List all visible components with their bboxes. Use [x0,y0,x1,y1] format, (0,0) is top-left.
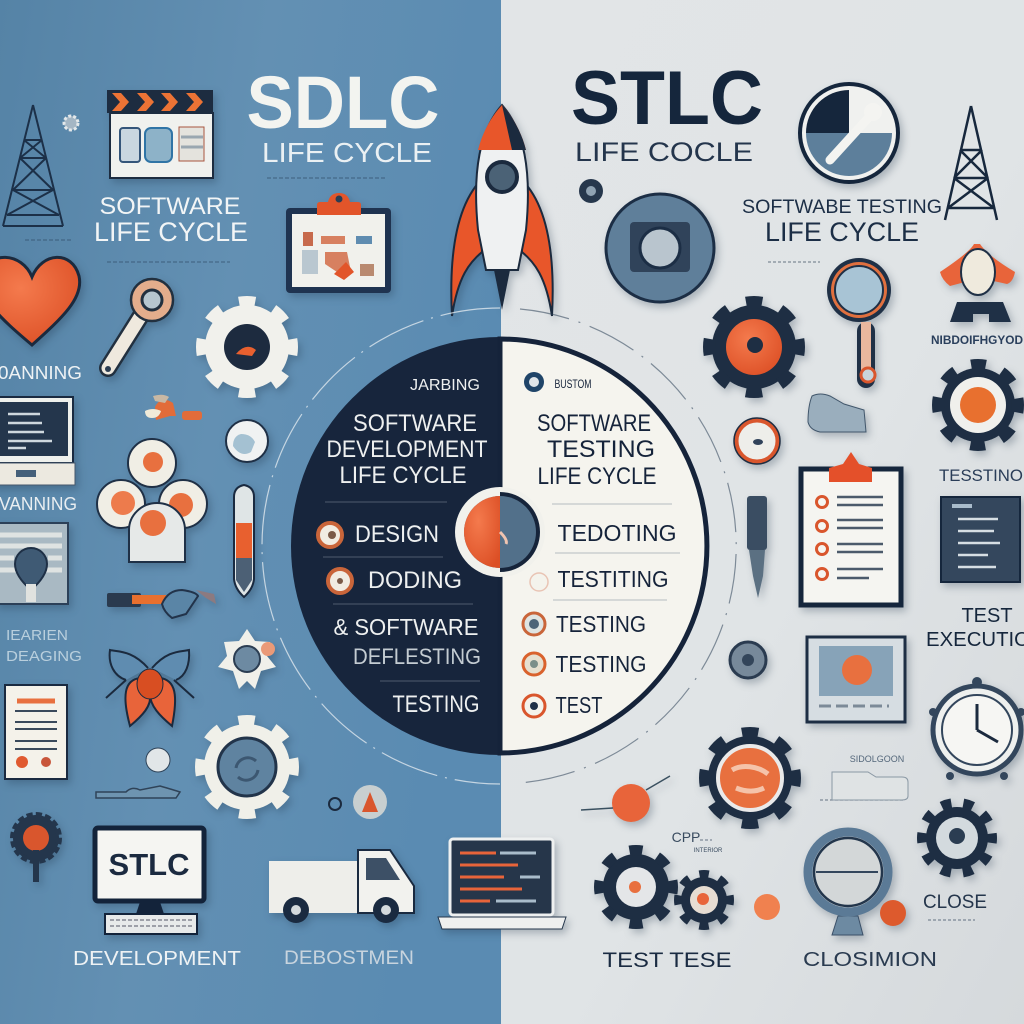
icon: twin gears [599,850,730,926]
icon: gear right top [709,302,799,392]
icon: grey rock [808,394,866,432]
icon: dial with wrench [800,84,898,182]
text: left disc labels: DESIGN [355,521,439,548]
icon: tower right [945,106,997,220]
icon: location pin badge [329,785,387,819]
icon: tower left [3,105,63,226]
title: STLC: LIFE COCLE [575,137,753,167]
icon: small gear burst [218,629,276,689]
icon: orange pin [581,776,670,822]
label: test execution [926,605,1024,651]
icon: orange dot [754,894,780,920]
icons: left disc bullets [318,523,352,593]
icon: pencil left [234,485,254,597]
icon: target [734,418,780,464]
heading: software testing life cycle right: LIFE CYCLE [765,217,919,247]
icon: small dot cam [579,179,603,203]
heading: software testing life cycle right [742,197,942,247]
icon: center hub [455,487,545,577]
icon: rocket [451,105,553,316]
heading: software life cycle left: LIFE CYCLE [94,217,248,247]
title: SDLC: LIFE CYCLE [262,137,432,168]
label: design faded left [6,627,82,665]
icon: small nodes [96,748,180,798]
label: maintenance small: NIBDOIFHGYOD [931,333,1023,347]
icon: code panel right [941,497,1020,582]
text: right disc labels: LIFE CYCLE [538,463,656,490]
icon: bug [106,650,194,726]
text: right disc labels: TESTITING [558,566,668,592]
label: tiny GPP text [672,829,723,854]
label: test execution: TEST [961,605,1013,627]
heading: software life cycle left [94,193,248,247]
icon: document screen left [0,523,68,604]
text: left disc labels: DODING [368,567,462,594]
text: right disc labels [537,377,676,718]
icon: stopwatch [929,677,1024,780]
label: development: DEVELOPMENT [73,948,241,970]
icon: people cluster [97,439,207,562]
title: STLC: STLC [571,56,763,141]
icon: grey round knob [730,642,766,678]
text: left disc labels [326,377,488,718]
icon: camera circle [606,194,714,302]
icon: gear left top [202,302,292,392]
icon: orange capsule [940,244,1015,322]
label: design faded left: IEARIEN [6,627,68,644]
icon: gear right mid [938,365,1018,445]
segment: light half [500,339,707,753]
label: test tese: TEST TESE [602,949,732,972]
icon: flower badge [13,815,59,882]
panel: SDLC background [0,0,501,1024]
label: close: CLOSE [923,892,987,913]
text: left disc labels: DEVELOPMENT [326,436,488,463]
text: right disc labels: TEST [556,692,602,718]
icon: image panel right [807,637,905,722]
icon: gear right large [705,733,795,823]
icon: clipboard left [286,193,391,293]
label: closimion: CLOSIMION [803,949,937,971]
text: left disc labels: TESTING [392,691,480,718]
panel: STLC background [501,0,1024,1024]
icons: right disc bullets [523,372,548,717]
icon: heart [0,257,80,345]
label: small garbled mid: SIDOLGOON [850,754,904,764]
text: left disc labels: JARBING [410,377,480,394]
chart: central life cycle disc [291,337,707,755]
icon: pen right [747,496,767,598]
icon: glasses [107,590,216,618]
label: planning middle: VANNING [0,494,77,514]
icon: large magnifier bottom [808,832,906,935]
icon: clapper board [107,90,213,178]
icon: document left [5,685,67,779]
icon: small orange bird [145,395,202,420]
icon: laptop left [0,397,75,485]
text: left disc labels: SOFTWARE [353,410,477,437]
icon: checklist clipboard [801,452,901,605]
label: tiny GPP text: INTERIOR [694,848,723,854]
label: tiny GPP text: CPP [672,829,700,845]
text: left disc labels: LIFE CYCLE [340,462,466,489]
heading: software life cycle left: SOFTWARE [100,193,240,220]
icon: wrench left [105,279,173,372]
label: testing right: TESSTINO [939,466,1023,485]
text: right disc labels: TESTING [547,436,655,463]
text: left disc labels: DEFLESTING [353,644,481,669]
text: right disc labels: TEDOTING [558,520,676,546]
icon: small grey bar [832,772,908,800]
icon: small round button [226,420,268,462]
text: right disc labels: TESTING [556,651,646,677]
icon: delivery truck [269,850,414,923]
icon: large gear left [201,721,293,813]
label: deployment garbled: DEBOSTMEN [284,948,414,969]
icon: gear right bottom [922,803,992,873]
text: right disc labels: TESTING [556,611,646,637]
text: right disc labels: SOFTWARE [537,410,651,437]
text: right disc labels: BUSTOM [554,377,592,391]
icon: laptop code center [438,839,566,929]
heading: software testing life cycle right: SOFTWABE TESTING [742,197,942,218]
icon: small gear top left [64,116,78,130]
icon: magnifier [827,258,891,388]
icon: STLC monitor [95,828,204,934]
title: SDLC: SDLC [246,61,440,144]
label: design faded left: DEAGING [6,648,82,665]
icon: STLC monitor: STLC [109,847,189,882]
text: left disc labels: & SOFTWARE [334,614,478,640]
label: planning top: 0ANNING [0,363,82,383]
segment: dark half [291,337,500,755]
